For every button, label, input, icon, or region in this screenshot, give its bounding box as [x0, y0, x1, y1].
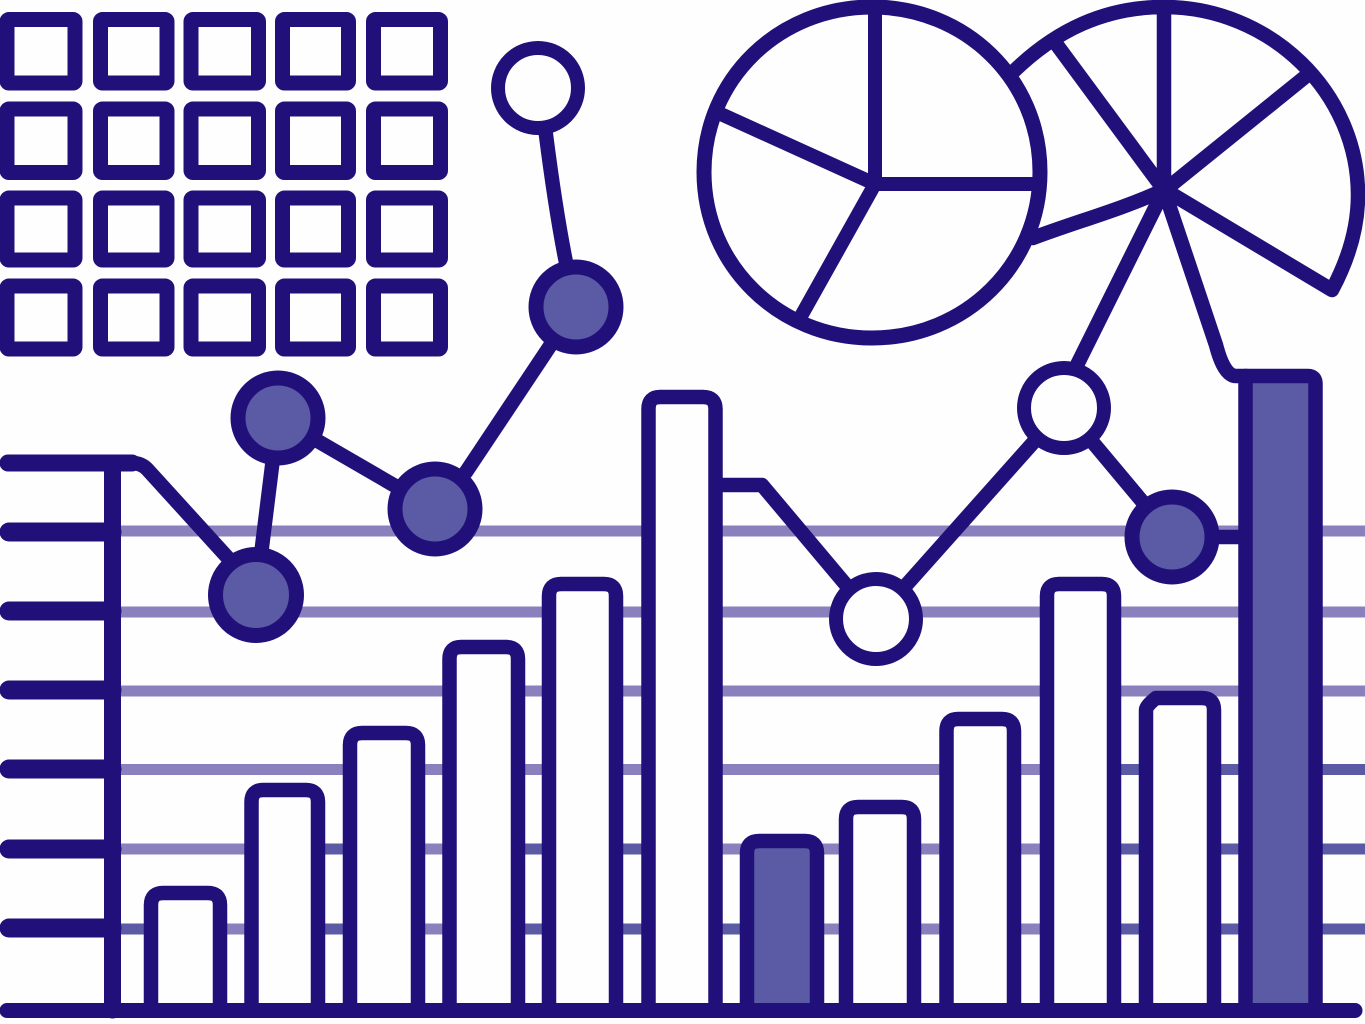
chart: first pie	[704, 5, 1040, 338]
bar	[946, 719, 1014, 1010]
bar	[151, 893, 220, 1010]
bar	[549, 584, 616, 1010]
baseline	[7, 1003, 1355, 1018]
data point	[395, 469, 475, 549]
bar chart	[151, 376, 1316, 1010]
bar	[1047, 584, 1114, 1010]
bar	[846, 807, 914, 1010]
line chart: right series	[722, 190, 1246, 659]
data point	[536, 267, 616, 347]
data point	[238, 378, 318, 458]
data point	[1024, 368, 1104, 448]
bar	[1146, 698, 1214, 1010]
data point	[498, 48, 578, 128]
data point	[1132, 497, 1212, 577]
bar: tall highlighted	[1246, 376, 1316, 1010]
data point	[216, 554, 296, 636]
bar	[350, 733, 418, 1010]
y axis with ticks	[8, 463, 132, 1010]
line chart: left series	[132, 48, 616, 636]
grid lines	[112, 531, 1365, 929]
icon: square grid	[7, 20, 440, 349]
data point	[836, 579, 916, 659]
bar: highlighted	[747, 841, 817, 1010]
chart: second pie with missing slice	[1013, 7, 1358, 290]
bar	[252, 790, 318, 1010]
bar	[450, 647, 518, 1010]
bar	[648, 397, 716, 1010]
stems to second pie	[1077, 190, 1246, 376]
